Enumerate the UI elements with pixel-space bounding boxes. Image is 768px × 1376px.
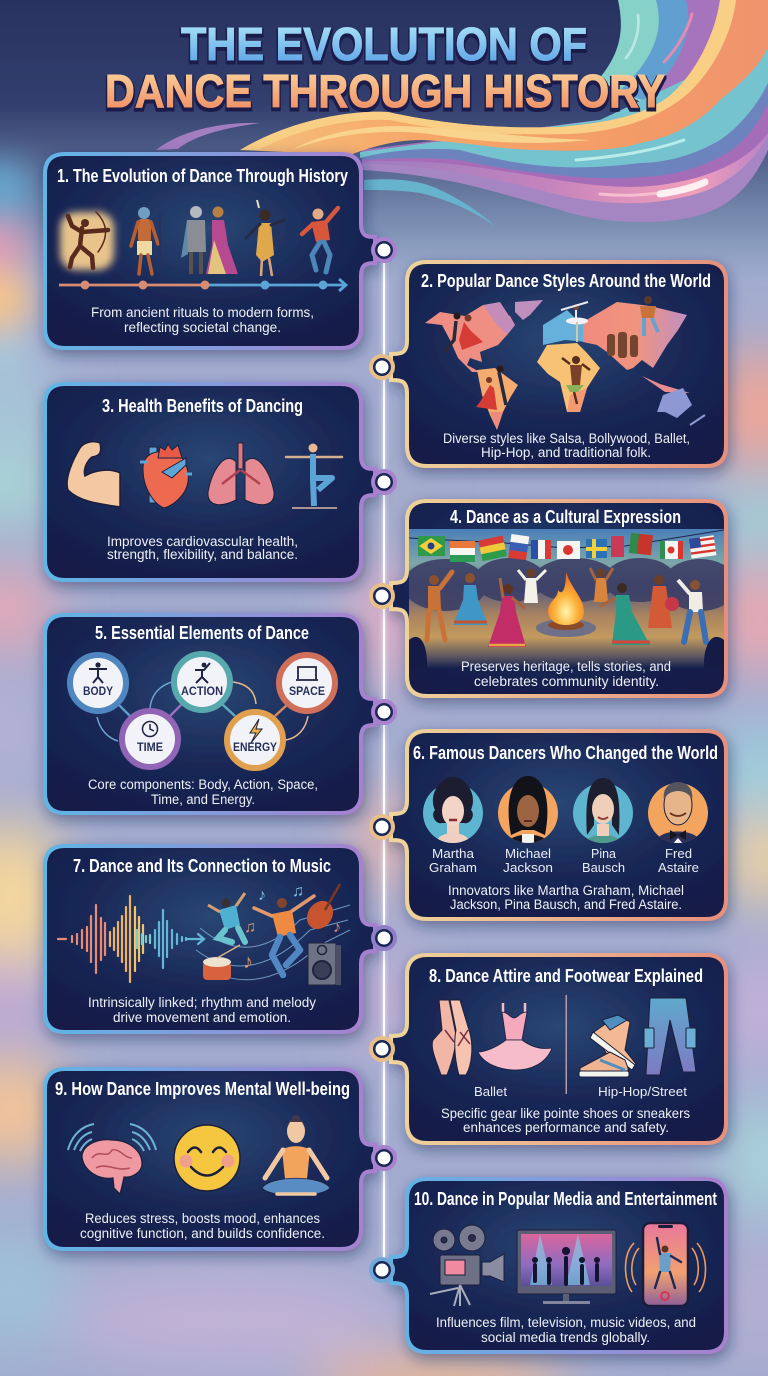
node 4 bbox=[371, 585, 393, 607]
music dancers bbox=[196, 883, 350, 985]
upper vertical bands bbox=[598, 0, 768, 112]
icon: cave painting bbox=[60, 212, 114, 270]
dancer names: Graham bbox=[429, 861, 477, 875]
music dancers: ♫ bbox=[244, 919, 256, 936]
panel: 6 famous dancers bbox=[391, 731, 726, 919]
node: time bbox=[122, 711, 178, 767]
heading 5: 5. Essential Elements of Dance bbox=[95, 623, 309, 643]
left swoosh bbox=[156, 123, 260, 150]
text block 7: drive movement and emotion. bbox=[113, 1010, 291, 1025]
text block 8: Specific gear like pointe shoes or sneakers bbox=[441, 1106, 690, 1121]
node 8 bbox=[371, 1038, 393, 1060]
music dancers: ♫ bbox=[292, 883, 304, 900]
heading 8: 8. Dance Attire and Footwear Explained bbox=[429, 966, 703, 986]
icon: meditating person bbox=[262, 1115, 330, 1196]
text block 5: Time, and Energy. bbox=[151, 792, 255, 807]
text block 5 bbox=[88, 777, 318, 807]
icon: smiley bbox=[174, 1125, 240, 1191]
panel: 10 media bbox=[391, 1179, 726, 1352]
music dancers: ♪ bbox=[243, 951, 253, 973]
dancers bbox=[427, 568, 706, 647]
icon: phone bbox=[626, 1223, 706, 1306]
highlights bbox=[576, 140, 684, 160]
icon: egyptian figure bbox=[131, 207, 160, 274]
icon: arm muscle bbox=[67, 442, 120, 507]
lower purple band bbox=[362, 90, 768, 222]
music dancers: ♪ bbox=[258, 887, 266, 904]
purple band bbox=[362, 80, 768, 187]
flowing rainbow ribbons bbox=[156, 0, 768, 227]
text block 7 bbox=[88, 995, 316, 1025]
node: time: TIME bbox=[137, 742, 163, 754]
dancer names: Jackson bbox=[503, 861, 553, 875]
dancer names: Pina bbox=[591, 847, 616, 861]
dancer names bbox=[429, 847, 699, 875]
dancer names: Fred bbox=[665, 847, 692, 861]
icon: pointe shoes bbox=[432, 1000, 472, 1075]
title: THE EVOLUTION OF bbox=[181, 18, 587, 70]
panel: 2 world styles bbox=[391, 262, 726, 466]
text block 9: Reduces stress, boosts mood, enhances bbox=[85, 1211, 320, 1226]
icon: brain bbox=[68, 1124, 156, 1194]
node: body bbox=[70, 655, 126, 711]
world map bbox=[425, 296, 705, 430]
text block 1: reflecting societal change. bbox=[124, 320, 281, 335]
text block 7: Intrinsically linked; rhythm and melody bbox=[88, 995, 316, 1010]
heading 7: 7. Dance and Its Connection to Music bbox=[73, 856, 331, 876]
panel: 8 attire bbox=[391, 955, 726, 1143]
map dancers bbox=[444, 296, 658, 410]
text block 3: Improves cardiovascular health, bbox=[107, 534, 298, 549]
header gradient sky bbox=[0, 0, 768, 285]
flags bbox=[409, 530, 724, 562]
portrait: fred astaire bbox=[648, 782, 708, 843]
dancer names: Astaire bbox=[658, 861, 699, 875]
heading 1: 1. The Evolution of Dance Through History bbox=[57, 166, 348, 186]
node: action bbox=[174, 654, 230, 710]
heading 3: 3. Health Benefits of Dancing bbox=[102, 396, 303, 416]
divider bbox=[566, 995, 567, 1094]
node: body: BODY bbox=[83, 686, 113, 698]
festival scene bbox=[403, 529, 738, 668]
node: action: ACTION bbox=[181, 686, 223, 698]
text block 4 bbox=[461, 659, 671, 689]
text block 2: Diverse styles like Salsa, Bollywood, Ballet, bbox=[443, 431, 690, 446]
icon: sneakers bbox=[579, 1015, 636, 1077]
node 10 bbox=[371, 1259, 393, 1281]
teal band bbox=[360, 40, 768, 167]
dancer names: Bausch bbox=[582, 861, 625, 875]
element diagram bbox=[70, 654, 335, 768]
text block 2 bbox=[443, 431, 690, 460]
text block 1 bbox=[91, 305, 314, 335]
attire labels bbox=[474, 1085, 688, 1099]
panel: 3 health bbox=[45, 384, 375, 580]
panel: 7 music bbox=[45, 846, 375, 1032]
panel: 4 cultural bbox=[391, 501, 738, 696]
node: energy: ENERGY bbox=[233, 742, 277, 754]
teal tail bbox=[364, 179, 496, 227]
icon: cargo pants bbox=[644, 998, 696, 1075]
dancer names: Martha bbox=[432, 847, 474, 861]
icon: balance dancer bbox=[286, 444, 342, 508]
heading 4: 4. Dance as a Cultural Expression bbox=[450, 507, 681, 527]
node 6 bbox=[371, 816, 393, 838]
panel: 5 elements bbox=[45, 615, 375, 813]
text block 6: Jackson, Pina Bausch, and Fred Astaire. bbox=[450, 897, 682, 912]
sound waveform bbox=[58, 896, 204, 982]
dancer names: Michael bbox=[505, 847, 551, 861]
node 7 bbox=[373, 927, 395, 949]
attire labels: Ballet bbox=[474, 1085, 508, 1099]
node 2 bbox=[371, 356, 393, 378]
node 1 bbox=[373, 239, 395, 261]
icon: street dancer bbox=[302, 208, 338, 272]
attire labels: Hip-Hop/Street bbox=[598, 1085, 688, 1099]
portrait: pina bausch bbox=[573, 778, 633, 850]
left edge colour wash bbox=[0, 160, 32, 379]
icon: tutu dress bbox=[478, 1003, 552, 1070]
text block 8: enhances performance and safety. bbox=[463, 1120, 669, 1135]
text block 6 bbox=[448, 883, 684, 912]
icon: film camera bbox=[430, 1225, 504, 1306]
text block 9 bbox=[80, 1211, 325, 1241]
text block 6: Innovators like Martha Graham, Michael bbox=[448, 883, 684, 898]
bonfire bbox=[536, 572, 596, 637]
node 3 bbox=[373, 471, 395, 493]
portrait: martha graham bbox=[423, 777, 483, 850]
node 5 bbox=[373, 701, 395, 723]
icon: medieval couple bbox=[181, 206, 238, 274]
text block 2: Hip-Hop, and traditional folk. bbox=[481, 445, 651, 460]
text block 4: celebrates community identity. bbox=[474, 674, 659, 689]
text block 3: strength, flexibility, and balance. bbox=[107, 547, 298, 562]
node: space bbox=[279, 655, 335, 711]
node 9 bbox=[373, 1147, 395, 1169]
text block 10: social media trends globally. bbox=[481, 1330, 650, 1345]
portrait: michael jackson bbox=[498, 776, 558, 850]
text block 1: From ancient rituals to modern forms, bbox=[91, 305, 314, 320]
music dancers: ♪ bbox=[333, 919, 341, 936]
text block 5: Core components: Body, Action, Space, bbox=[88, 777, 318, 792]
timeline arrow bbox=[59, 279, 346, 291]
text block 10 bbox=[436, 1315, 696, 1345]
icon: heart bbox=[140, 444, 192, 508]
title: DANCE THROUGH HISTORY bbox=[105, 65, 665, 117]
icon: television bbox=[517, 1230, 616, 1304]
periwinkle band bbox=[362, 65, 768, 178]
icon: lungs bbox=[208, 443, 274, 505]
panel: 9 mental bbox=[45, 1069, 375, 1249]
text block 9: cognitive function, and builds confidence. bbox=[80, 1226, 325, 1241]
text block 3 bbox=[107, 534, 298, 562]
node: energy bbox=[227, 712, 283, 768]
text block 8 bbox=[441, 1106, 690, 1135]
heading 9: 9. How Dance Improves Mental Well-being bbox=[55, 1079, 350, 1099]
orange band bbox=[240, 0, 768, 155]
node: space: SPACE bbox=[289, 686, 325, 698]
title bbox=[105, 18, 665, 117]
text block 10: Influences film, television, music videos, and bbox=[436, 1315, 696, 1330]
text block 4: Preserves heritage, tells stories, and bbox=[461, 659, 671, 674]
timeline spine bbox=[382, 250, 386, 1270]
pink band bbox=[362, 90, 768, 203]
crowd bbox=[403, 558, 738, 611]
yellow stripes bbox=[240, 0, 736, 150]
panel: 1 evolution bbox=[45, 154, 375, 348]
icon: flapper dancer bbox=[246, 200, 284, 276]
connectors bbox=[97, 682, 308, 741]
